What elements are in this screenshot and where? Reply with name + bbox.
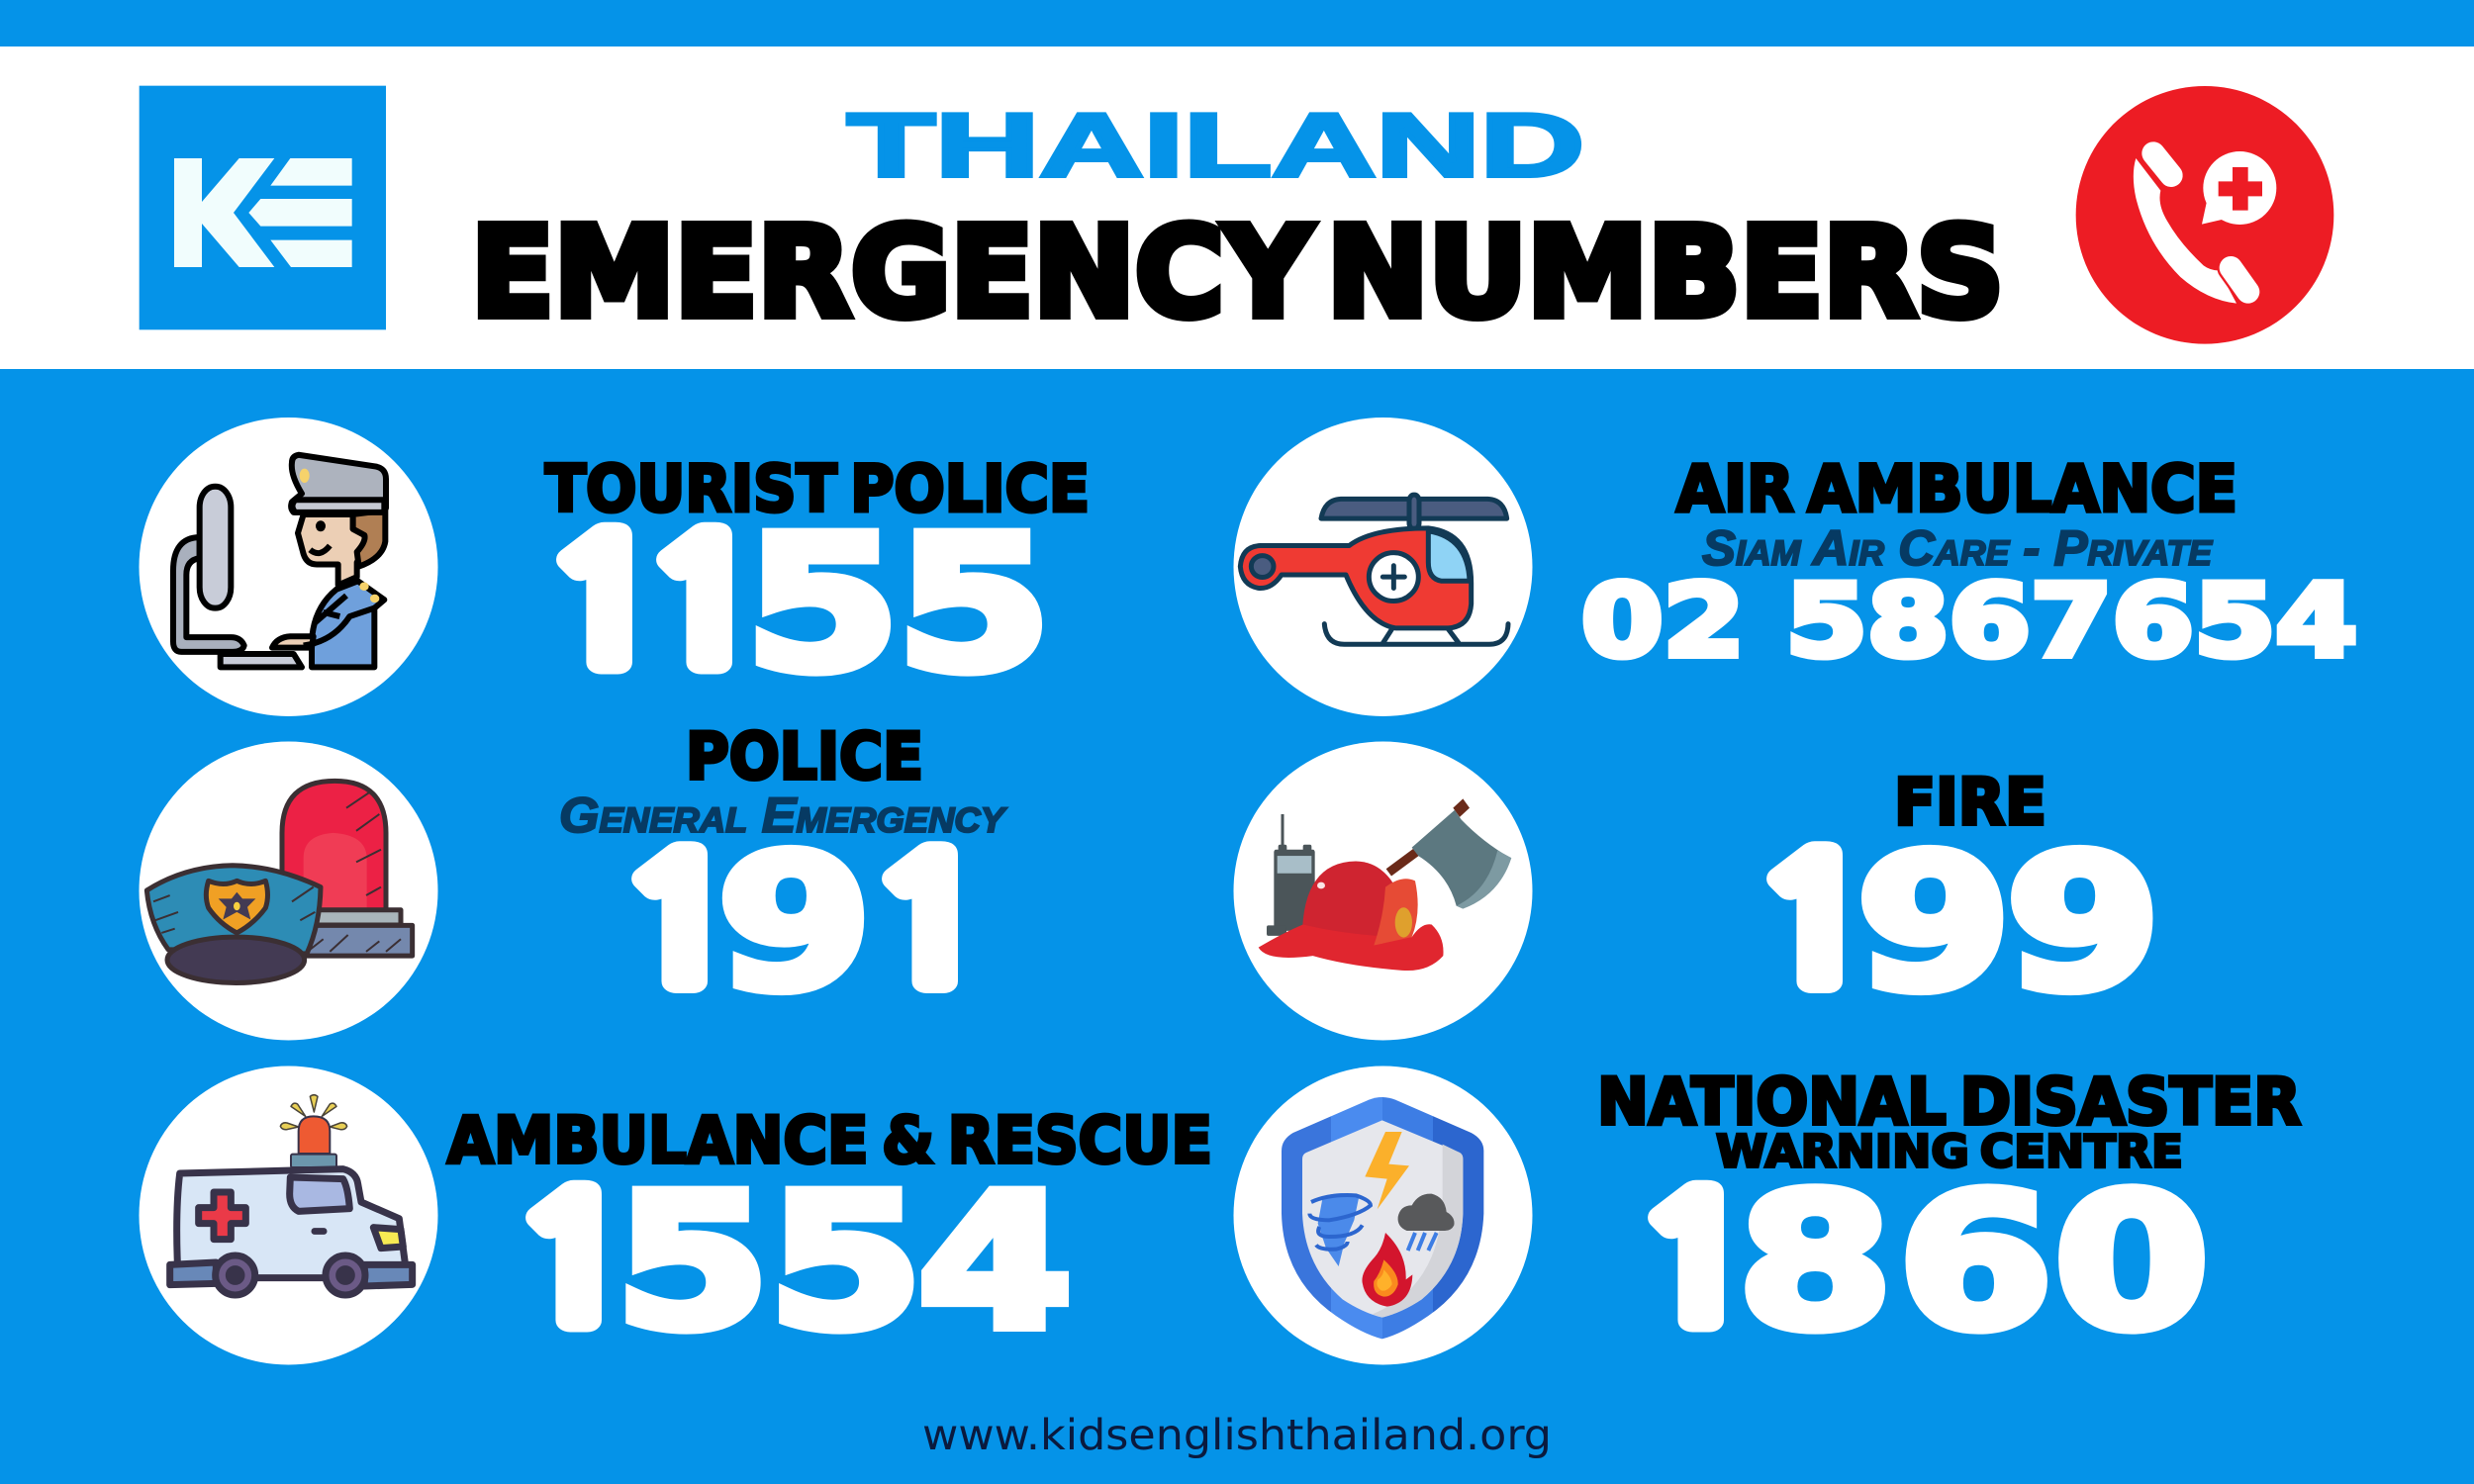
- heading: air ambulance: AIR AMBULANCE: [1676, 453, 2237, 526]
- header band: [0, 46, 2474, 369]
- number: 191: 1: [617, 837, 743, 1009]
- number: 1860: 6: [1898, 1155, 2052, 1370]
- icon: phone with medical cross: [2076, 86, 2333, 344]
- icon: police officer at computer: [139, 417, 437, 716]
- number: 191: 9: [717, 815, 872, 1031]
- number: 199: 1: [1752, 837, 1878, 1009]
- number: 199: 9: [1856, 815, 2011, 1031]
- heading: tourist police: TOURIST POLICE: [545, 453, 1090, 526]
- number: 1554: 4: [918, 1155, 1073, 1370]
- panel: tourist police: [139, 417, 1090, 716]
- number: 1554: 5: [768, 1155, 923, 1370]
- number: 1155: 1: [641, 517, 768, 690]
- title: Thailand: THAILAND: [847, 96, 1584, 196]
- number: 199: 9: [2006, 815, 2160, 1031]
- number: 1155: 5: [897, 497, 1051, 712]
- panel: ambulance and rescue: [139, 1067, 1212, 1370]
- icon: disaster shield: [1233, 1067, 1532, 1365]
- heading: national disaster: NATIONAL DISASTER: [1597, 1066, 2301, 1140]
- panel: national disaster warning centre: [1233, 1066, 2301, 1370]
- subheading: siam air care private: Siam Air Care - Private: [1702, 520, 2214, 576]
- logo: KE: [140, 86, 386, 329]
- number: 02 5867654: 02 5867654: [1581, 562, 2357, 679]
- number: 1860: 8: [1738, 1155, 1892, 1370]
- heading: fire: FIRE: [1894, 766, 2046, 840]
- subheading: general emergency: General Emergency: [559, 788, 1007, 843]
- panel: police: [139, 720, 1007, 1041]
- number: 191: 1: [867, 837, 994, 1009]
- number: 1155: 5: [745, 497, 900, 712]
- heading: police: POLICE: [686, 720, 923, 794]
- number: 1860: 1: [1633, 1175, 1760, 1347]
- icon: ambulance: [139, 1067, 437, 1365]
- subheading: warning centre: WARNING CENTRE: [1716, 1126, 2183, 1177]
- title: Emergency Numbers: EMERGENCY NUMBERS: [471, 202, 2004, 344]
- number: 1554: 5: [616, 1155, 770, 1370]
- icon: helicopter: [1233, 417, 1532, 716]
- number: 1155: 1: [541, 517, 668, 690]
- heading: ambulance and rescue: AMBULANCE & RESCUE: [447, 1104, 1212, 1178]
- icon: fire helmet, radio and axe: [1233, 742, 1532, 1041]
- number: 1860: 0: [2054, 1155, 2209, 1370]
- panel: air ambulance: [1233, 417, 2357, 716]
- website footer: www.kidsenglishthailand.org: [922, 1411, 1552, 1460]
- icon: police cap and siren: [139, 742, 437, 1041]
- number: 1554: 1: [511, 1175, 637, 1347]
- panel: fire: [1233, 742, 2160, 1041]
